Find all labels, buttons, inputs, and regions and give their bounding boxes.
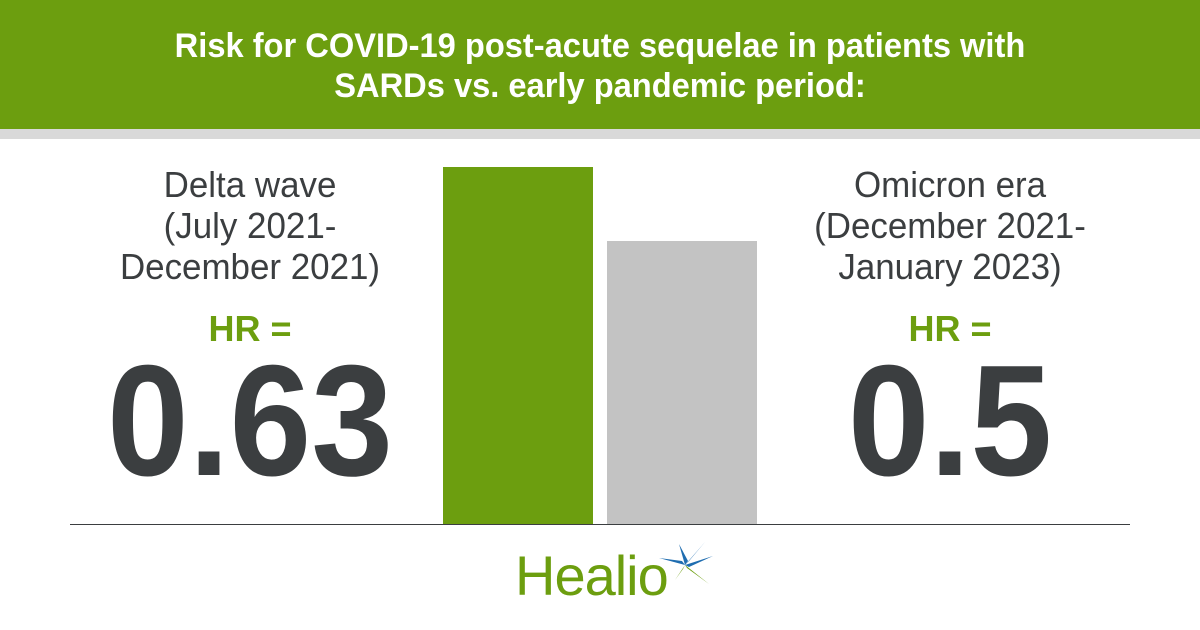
label omicron: (December 2021- <box>814 205 1086 246</box>
HR label right: HR = <box>908 308 992 349</box>
left panel: Delta wave <box>107 164 393 509</box>
title <box>175 27 1025 105</box>
logo: Healio: Healio <box>515 544 668 607</box>
label delta <box>120 164 380 287</box>
bar omicron <box>607 241 757 525</box>
label delta: Delta wave <box>164 164 336 205</box>
right panel: Omicron era <box>814 164 1086 509</box>
title: Risk for COVID-19 post-acute sequelae in patients with <box>175 27 1025 65</box>
header banner <box>0 0 1200 129</box>
icon: star <box>659 542 713 584</box>
title: SARDs vs. early pandemic period: <box>334 67 866 105</box>
value 0.5: 0.5 <box>848 333 1052 509</box>
label delta: December 2021) <box>120 246 380 287</box>
label omicron <box>814 164 1086 287</box>
label omicron: January 2023) <box>838 246 1062 287</box>
label omicron: Omicron era <box>854 164 1046 205</box>
label delta: (July 2021- <box>164 205 336 246</box>
gray strip <box>0 129 1200 139</box>
bar chart <box>443 167 757 524</box>
HR label left: HR = <box>208 308 292 349</box>
value 0.63: 0.63 <box>107 333 393 509</box>
bar delta <box>443 167 593 525</box>
